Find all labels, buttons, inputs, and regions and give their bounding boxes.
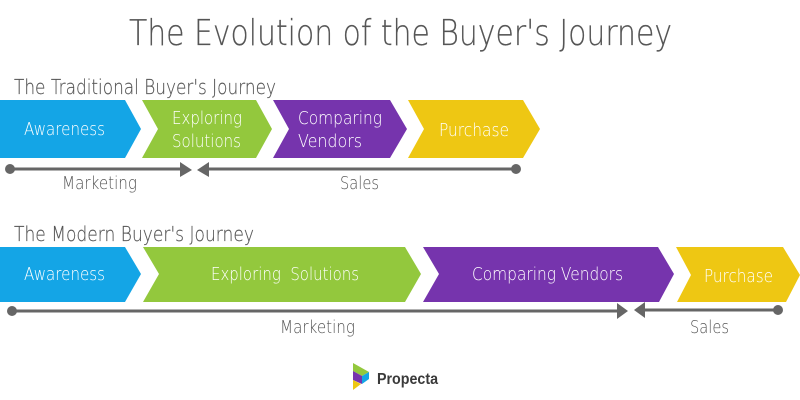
panel: traditional journey chevrons	[0, 100, 540, 158]
chevron: exploring solutions	[143, 247, 421, 302]
chevron: exploring solutions: Exploring	[172, 109, 242, 129]
arrow: modern marketing	[7, 303, 628, 319]
chevron: exploring solutions	[142, 100, 272, 158]
chevron: comparing vendors	[273, 100, 407, 158]
chevron: awareness	[0, 247, 141, 302]
chevron: exploring solutions: Exploring Solutions	[211, 265, 359, 285]
title: The Evolution of the Buyer's Journey	[129, 13, 672, 54]
chevron: purchase	[408, 100, 540, 158]
chevron: purchase: Purchase	[439, 121, 509, 141]
chevron: comparing vendors: Comparing Vendors	[472, 265, 623, 285]
arrow: traditional marketing	[5, 162, 192, 177]
chevron: exploring solutions: Solutions	[172, 132, 241, 152]
chevron: awareness	[0, 100, 141, 158]
chevron: purchase: Purchase	[704, 267, 773, 287]
label: traditional marketing: Marketing	[62, 174, 137, 194]
chevron: comparing vendors	[423, 247, 674, 302]
panel: modern journey chevrons	[0, 247, 800, 302]
chevron: awareness: Awareness	[24, 120, 105, 140]
label: modern marketing: Marketing	[280, 318, 355, 338]
logo: Propecta	[353, 363, 438, 390]
wordmark: Propecta	[377, 371, 438, 388]
arrow: modern sales	[634, 302, 783, 318]
icon: Propecta mark	[353, 363, 369, 390]
label: traditional sales: Sales	[340, 174, 379, 194]
label: modern sales: Sales	[690, 318, 729, 338]
heading: traditional journey: The Traditional Buyer's Journey	[14, 75, 276, 99]
arrow: traditional sales	[197, 162, 521, 177]
chevron: purchase	[676, 247, 800, 302]
chevron: awareness: Awareness	[24, 265, 105, 285]
chevron: comparing vendors: Comparing	[298, 109, 382, 129]
chevron: comparing vendors: Vendors	[298, 132, 362, 152]
heading: modern journey: The Modern Buyer's Journey	[14, 222, 254, 246]
